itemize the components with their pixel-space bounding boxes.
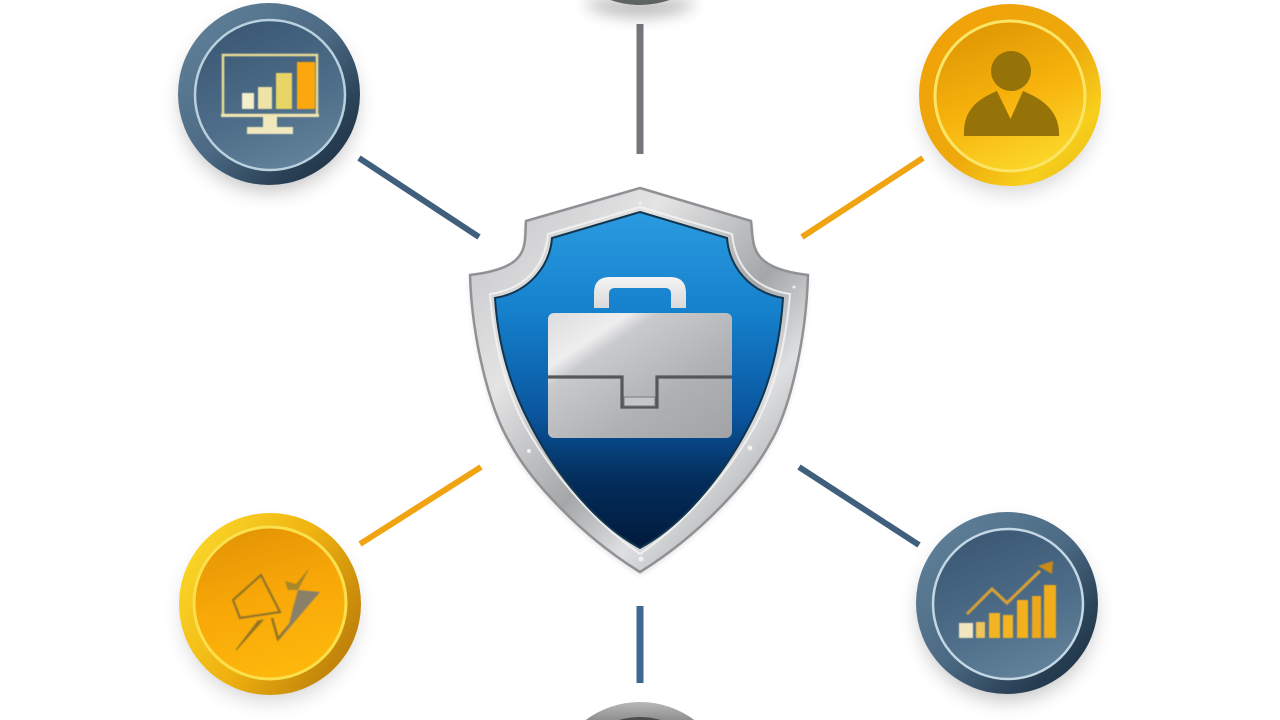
briefcase seam and clasp bbox=[548, 377, 732, 407]
briefcase handle bbox=[594, 277, 686, 308]
node: top-left slate monitor bbox=[178, 3, 360, 190]
node: top-right gold person bbox=[919, 4, 1101, 191]
shield: light bevel bbox=[490, 207, 790, 554]
node: bottom-right slate growth chart bbox=[916, 512, 1098, 699]
shield: central emblem bbox=[470, 188, 808, 575]
briefcase body bbox=[548, 313, 732, 438]
node: top circle, cropped bbox=[585, 0, 695, 16]
node: bottom-left gold broken shape bbox=[179, 513, 361, 700]
connector: bottom-left orange bbox=[360, 467, 481, 544]
icon: monitor with bar chart bbox=[221, 55, 319, 134]
connector: bottom-right slate bbox=[799, 467, 919, 545]
connector: top grey bbox=[636, 24, 644, 154]
icon: person silhouette bbox=[964, 51, 1059, 136]
node: bottom circle, cropped bbox=[586, 702, 694, 720]
icon: briefcase bbox=[548, 277, 732, 438]
shield: rivets bbox=[527, 202, 796, 562]
connector: top-left slate bbox=[359, 158, 479, 237]
connector: bottom blue bbox=[636, 606, 644, 683]
shield: blue field bbox=[495, 212, 783, 548]
icon: bars with rising arrow bbox=[959, 561, 1056, 638]
icon: broken document and lightning bbox=[233, 567, 320, 650]
shield: metal rim bbox=[470, 188, 808, 572]
connector: top-right orange bbox=[802, 158, 923, 237]
